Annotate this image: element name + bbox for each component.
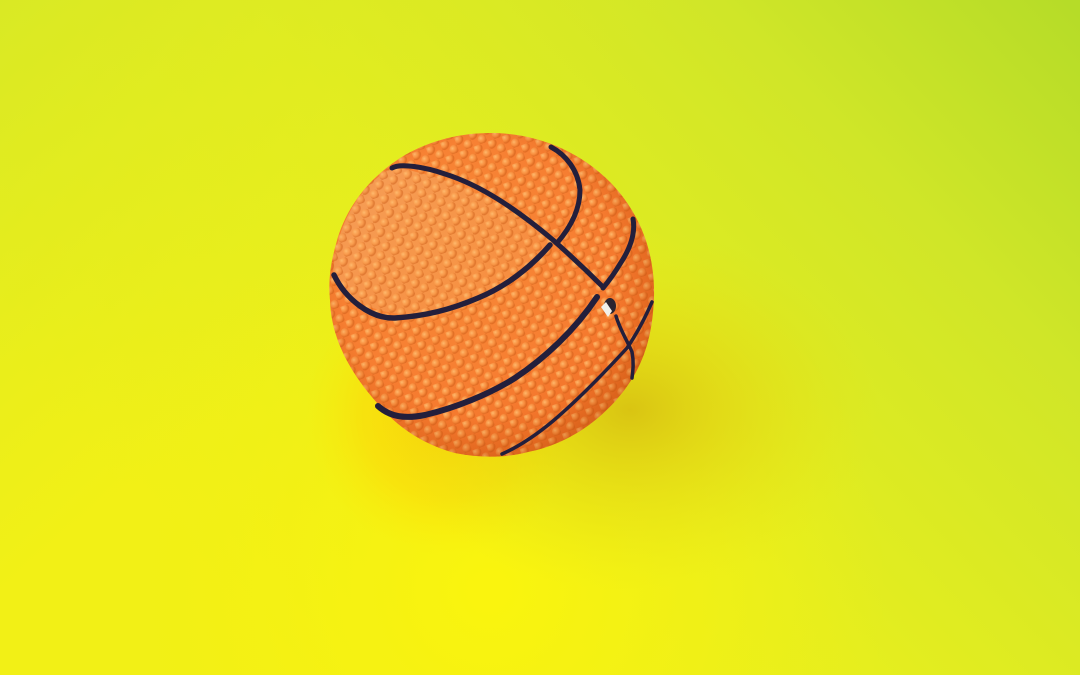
seam: right upper arc [603, 219, 634, 288]
seam: long diagonal [392, 166, 603, 287]
ball shadow on the surface [305, 220, 900, 600]
seam: upper band [334, 245, 550, 318]
seam: lower band [502, 302, 652, 454]
seam: diagonal continuation [616, 316, 633, 378]
basketball [329, 133, 654, 457]
ball seams [334, 147, 652, 454]
ball body with dimpled texture [329, 133, 654, 457]
seam: top arc [551, 147, 580, 243]
seam: middle band [378, 297, 597, 417]
scuff mark on seam [601, 298, 616, 317]
